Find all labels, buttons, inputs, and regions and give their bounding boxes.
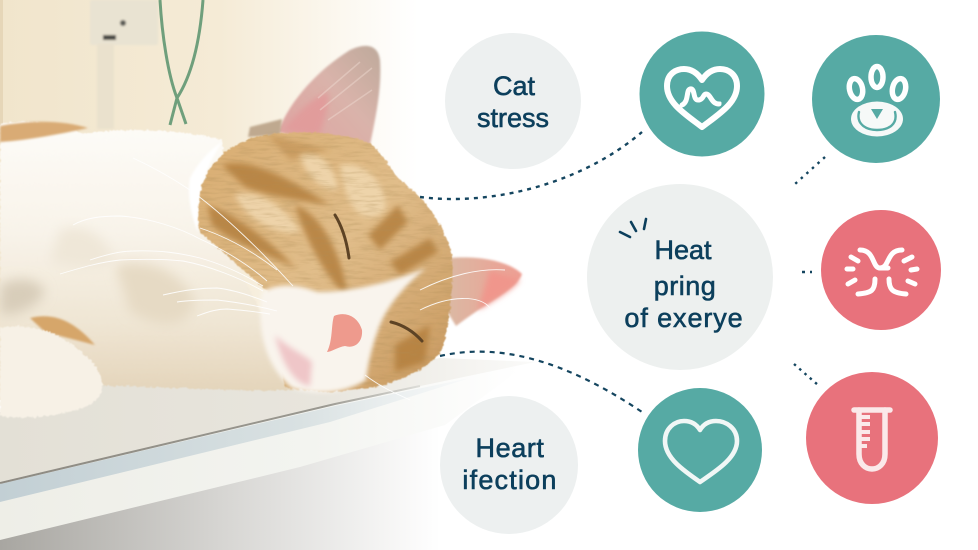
connector: head to heart-rate icon [420,132,642,199]
under-shelf shadow [0,410,460,550]
label bubble: Heat pring of exerye: Heat [654,235,712,265]
label bubble: Heart ifection: ifection [462,465,558,495]
closed eye bottom [391,322,422,341]
icon: cat nose and whiskers [821,210,941,330]
icon: test tube [806,372,938,504]
top ear [248,46,380,145]
icon: paw [812,35,940,163]
shelf edge [0,362,530,540]
cat nose [327,314,362,352]
heated mat [0,358,535,483]
label bubble: Heat pring of exerye: pring [654,271,716,301]
fur grain [199,132,453,388]
white muzzle [260,268,426,393]
label bubble: Heat pring of exerye [587,184,773,370]
cat body [0,122,300,390]
label bubble: Heart ifection: Heart [475,433,545,463]
photo: sleeping cat on a heated mat [0,0,535,550]
icon: heart outline [638,388,762,512]
connector: cheek to heart icon [440,352,645,414]
pink chin [275,335,312,386]
label bubble: Cat stress: stress [477,103,549,133]
front paw [0,326,102,418]
wall socket [90,0,158,129]
label bubble: Cat stress: Cat [493,71,535,101]
connector: paw icon [795,157,825,184]
right ear [440,257,522,326]
green cables [160,0,203,125]
label bubble: Heat pring of exerye: of exerye [624,303,744,333]
label bubble: Heart ifection [440,396,578,534]
icon: heart with pulse line [640,32,764,156]
forehead markings [207,135,438,372]
label bubble: Cat stress [445,33,581,169]
connector: test tube icon [794,364,818,385]
cat head [198,132,453,393]
connector: nose icon [802,271,812,273]
closed eye top [335,215,349,258]
whiskers [60,158,505,400]
